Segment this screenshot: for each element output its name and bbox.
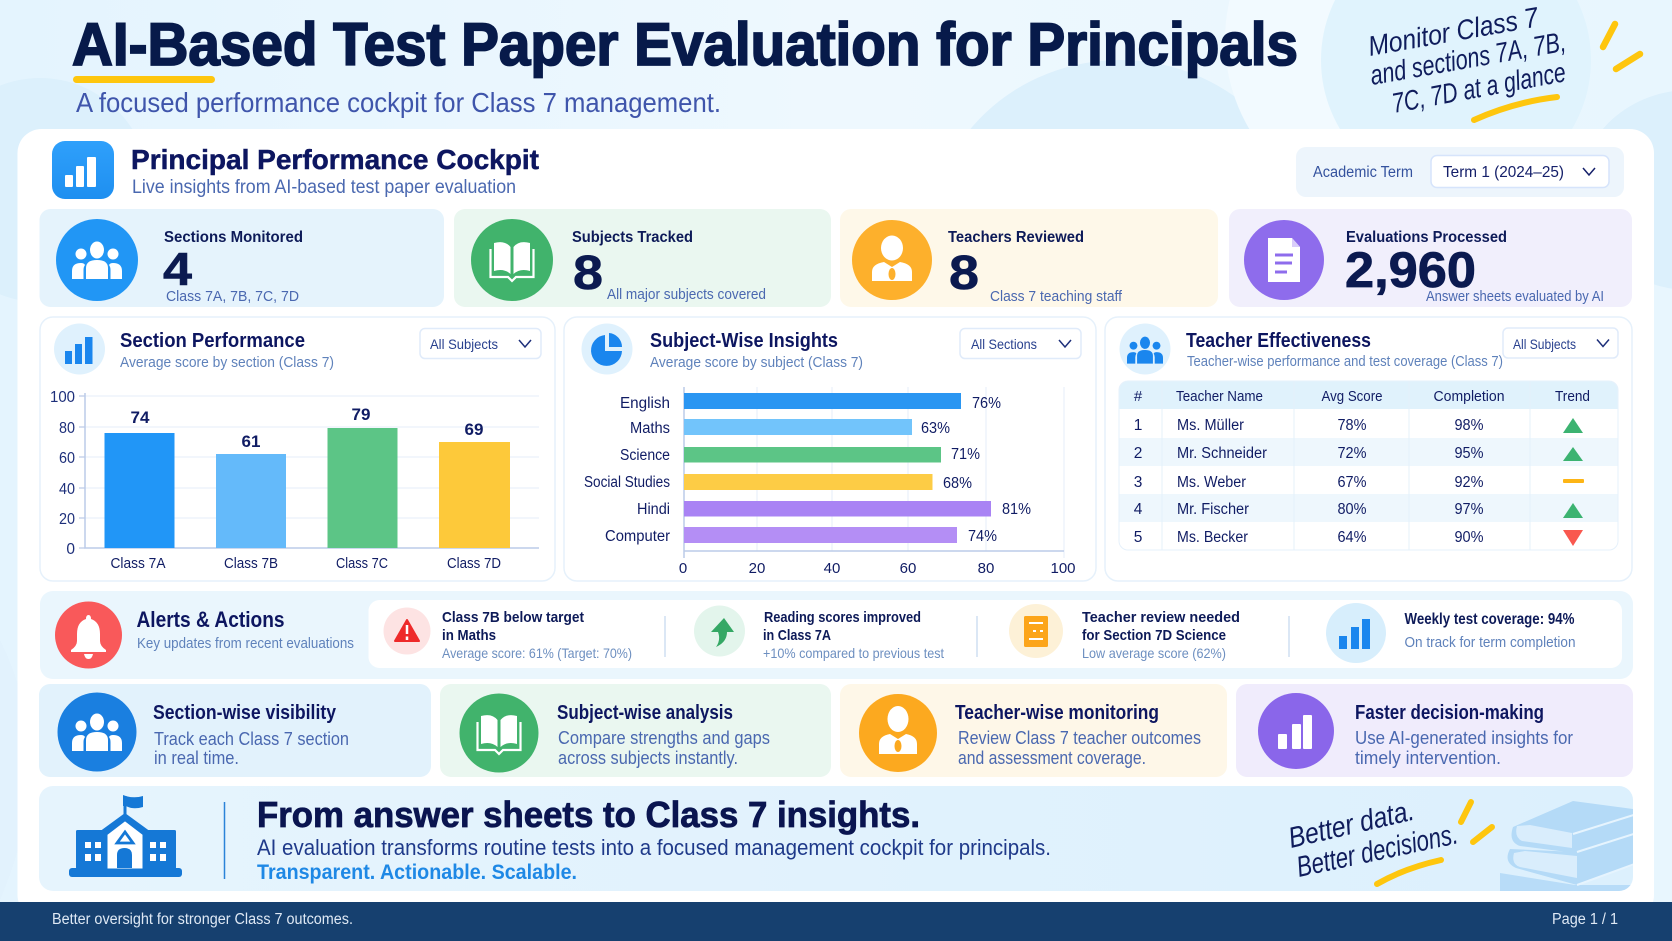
horizontal bar chart: subject scores: Maths	[630, 420, 670, 437]
table row 1: 78%	[1338, 417, 1367, 434]
alert: below target: Average score: 61% (Target: 70%)	[442, 645, 632, 661]
table row 3: 3	[1134, 474, 1142, 491]
academic term selector: Academic Term	[1313, 164, 1413, 181]
alerts heading: Alerts & Actions	[136, 607, 284, 632]
bar chart: section scores: 20	[59, 511, 75, 528]
icon: teacher	[852, 220, 932, 300]
table row 5: 90%	[1454, 529, 1484, 546]
icon: teacher	[859, 694, 937, 772]
bar chart: section scores: 69	[465, 420, 483, 439]
table row 1: 1	[1134, 417, 1142, 434]
dropdown: All Sections	[971, 336, 1037, 352]
horizontal bar chart: subject scores	[584, 387, 1076, 577]
KPI: teachers reviewed: Teachers Reviewed	[948, 229, 1084, 246]
alert: reading improved: +10% compared to previous test	[763, 645, 944, 661]
panel: section performance: Average score by section (Class 7)	[120, 354, 334, 371]
table row 5	[1134, 529, 1583, 546]
table: teachers: Completion	[1434, 388, 1504, 405]
horizontal bar chart: subject scores: Hindi	[637, 501, 670, 518]
panel: section performance	[40, 317, 555, 581]
title: AI-Based Test Paper Evaluation for Principals	[72, 11, 1298, 78]
banner text: AI evaluation transforms routine tests into a focused management cockpit for principals.	[257, 835, 1051, 860]
icon: bell	[55, 602, 122, 668]
academic term selector: Term 1 (2024–25)	[1443, 164, 1564, 181]
feature: subject-wise analysis: Subject-wise analysis	[557, 702, 733, 724]
feature: teacher-wise monitoring: and assessment coverage.	[958, 748, 1146, 768]
dropdown	[420, 328, 541, 358]
horizontal bar chart: subject scores: 63%	[921, 420, 950, 437]
heading: Subject-Wise Insights	[650, 330, 838, 352]
KPI: subjects tracked	[454, 209, 831, 307]
feature: section-wise visibility: Track each Class 7 section	[154, 729, 349, 749]
dropdown: All Subjects	[430, 336, 498, 352]
KPI: sections monitored: 4	[163, 243, 192, 295]
table: teachers	[1119, 381, 1618, 550]
KPI: subjects tracked: 8	[573, 247, 603, 300]
table: teachers: Avg Score	[1322, 388, 1382, 405]
callout: monitor class 7	[1366, 1, 1640, 120]
icon: book	[460, 694, 538, 772]
callout: better data: Better decisions.	[1294, 818, 1461, 884]
feature: faster decision-making: timely intervention.	[1355, 748, 1501, 768]
table row 1: 98%	[1454, 417, 1484, 434]
horizontal bar chart: subject scores: 20	[749, 560, 765, 577]
heading: Teacher Effectiveness	[1186, 330, 1371, 352]
bar chart: section scores: 0	[66, 541, 75, 558]
bar chart: section scores: Class 7B	[224, 555, 278, 572]
feature: faster decision-making: Faster decision-making	[1355, 702, 1544, 724]
horizontal bar chart: subject scores: Social Studies	[584, 474, 670, 491]
horizontal bar chart: subject scores: 68%	[943, 475, 972, 492]
table row 4: 97%	[1454, 501, 1484, 518]
alert: weekly coverage	[1326, 603, 1576, 663]
bar chart: section scores: 80	[59, 420, 75, 437]
table row 5: Ms. Becker	[1177, 529, 1248, 546]
table row 3: 67%	[1338, 474, 1367, 491]
horizontal bar chart: subject scores: 71%	[951, 446, 980, 463]
icon: teachers	[1120, 324, 1170, 374]
KPI: subjects tracked: Subjects Tracked	[572, 229, 693, 246]
alert: teacher review: Teacher review needed	[1082, 609, 1240, 626]
table row 4: 4	[1134, 501, 1143, 518]
heading: Section Performance	[120, 330, 305, 352]
feature: faster decision-making	[1236, 684, 1633, 777]
footer	[0, 902, 1672, 941]
bar chart: section scores: 60	[59, 450, 75, 467]
icon: people	[58, 692, 136, 772]
KPI: evaluations processed: Evaluations Processed	[1346, 229, 1507, 246]
dropdown	[1503, 328, 1618, 358]
alert: reading improved	[694, 606, 944, 661]
background	[0, 0, 1672, 300]
table row 5: 64%	[1338, 529, 1367, 546]
table row 5: 5	[1134, 529, 1142, 546]
bar chart: section scores: Class 7C	[336, 555, 388, 572]
feature: section-wise visibility	[39, 684, 431, 777]
bar chart: section scores: 61	[242, 432, 260, 451]
table row 4	[1134, 501, 1583, 518]
KPI: evaluations processed	[1229, 209, 1632, 307]
icon: bars	[54, 324, 105, 374]
callout: better data: Better data.	[1285, 795, 1417, 855]
horizontal bar chart: subject scores: English	[620, 395, 670, 412]
bar chart: section scores: Class 7D	[447, 555, 501, 572]
panel: subject-wise insights: Average score by subject (Class 7)	[650, 354, 863, 371]
alert: weekly coverage: On track for term completion	[1404, 635, 1576, 651]
table row 2	[1134, 445, 1583, 462]
table: teachers: Teacher Name	[1176, 388, 1263, 405]
illustration: books	[1500, 801, 1640, 891]
feature: teacher-wise monitoring	[840, 684, 1227, 777]
table: teachers: #	[1134, 388, 1143, 405]
KPI: sections monitored	[40, 209, 444, 307]
table: teachers: Trend	[1555, 388, 1590, 405]
panel: teacher effectiveness: Teacher-wise performance and test coverage (Class 7)	[1187, 353, 1503, 370]
feature: subject-wise analysis	[440, 684, 831, 777]
bar chart: section scores: 100	[50, 389, 75, 406]
horizontal bar chart: subject scores: 40	[824, 560, 840, 577]
feature: teacher-wise monitoring: Review Class 7 teacher outcomes	[958, 728, 1201, 748]
horizontal bar chart: subject scores: Science	[620, 447, 670, 464]
KPI: teachers reviewed: 8	[949, 247, 979, 300]
panel: subject-wise insights	[564, 317, 1096, 581]
table row 1: Ms. Müller	[1177, 417, 1244, 434]
icon: pie	[582, 324, 632, 374]
alert: below target: in Maths	[442, 627, 496, 644]
alert: teacher review	[1009, 604, 1240, 661]
panel: alerts and actions: Key updates from recent evaluations	[137, 635, 354, 652]
bar chart: section scores: Class 7A	[110, 555, 166, 572]
KPI: sections monitored: Class 7A, 7B, 7C, 7D	[166, 288, 299, 305]
KPI: subjects tracked: All major subjects covered	[607, 286, 766, 303]
horizontal bar chart: subject scores: 80	[978, 560, 994, 577]
alert: below target: Class 7B below target	[442, 609, 584, 626]
horizontal bar chart: subject scores: 74%	[968, 528, 997, 545]
subtitle: A focused performance cockpit for Class 7 management.	[76, 87, 721, 118]
icon: cockpit bars	[52, 141, 114, 199]
bar chart: section scores: 74	[131, 408, 150, 427]
dropdown: All Subjects	[1513, 336, 1576, 352]
alerts strip	[368, 600, 1622, 668]
table row 1	[1134, 417, 1583, 434]
alert: reading improved: in Class 7A	[763, 627, 831, 644]
feature: section-wise visibility: Section-wise visibility	[153, 702, 337, 724]
academic term selector	[1296, 147, 1624, 197]
alert: below target	[384, 608, 632, 661]
banner tagline: Transparent. Actionable. Scalable.	[257, 861, 577, 884]
table row 4: Mr. Fischer	[1177, 501, 1249, 518]
horizontal bar chart: subject scores: 76%	[972, 395, 1001, 412]
alert: weekly coverage: Weekly test coverage: 94%	[1404, 611, 1574, 628]
KPI: evaluations processed: Answer sheets evaluated by AI	[1426, 288, 1604, 305]
cockpit header	[52, 141, 539, 199]
cockpit subheading: Live insights from AI-based test paper evaluation	[132, 176, 516, 198]
feature: section-wise visibility: in real time.	[154, 748, 239, 768]
cockpit heading: Principal Performance Cockpit	[131, 144, 539, 175]
KPI: teachers reviewed	[840, 209, 1218, 307]
feature: subject-wise analysis: Compare strengths and gaps	[558, 728, 770, 748]
feature: teacher-wise monitoring: Teacher-wise monitoring	[955, 702, 1159, 724]
dropdown	[960, 328, 1081, 358]
callout: monitor class 7: and sections 7A, 7B,	[1368, 26, 1568, 91]
banner heading: From answer sheets to Class 7 insights.	[257, 794, 920, 835]
table row 3	[1134, 474, 1584, 491]
bar chart: section scores: 40	[59, 481, 75, 498]
panel: alerts and actions	[40, 591, 1633, 679]
icon: document	[1244, 220, 1324, 300]
KPI: evaluations processed: 2,960	[1345, 242, 1476, 298]
table row 4: 80%	[1338, 501, 1367, 518]
banner	[39, 786, 1640, 891]
table row 3: 92%	[1454, 474, 1484, 491]
icon: school	[69, 795, 182, 877]
callout: monitor class 7: 7C, 7D at a glance	[1389, 56, 1568, 119]
alert: reading improved: Reading scores improved	[764, 609, 921, 626]
icon: people	[56, 219, 138, 301]
KPI: teachers reviewed: Class 7 teaching staff	[990, 288, 1123, 305]
bar chart: section scores	[50, 389, 539, 572]
horizontal bar chart: subject scores: 100	[1050, 560, 1076, 577]
footer: Better oversight for stronger Class 7 outcomes.	[52, 911, 353, 928]
KPI: sections monitored: Sections Monitored	[164, 229, 303, 246]
alert: teacher review: Low average score (62%)	[1082, 645, 1226, 661]
feature: subject-wise analysis: across subjects instantly.	[558, 748, 738, 768]
bar chart: section scores: 79	[352, 405, 370, 424]
horizontal bar chart: subject scores: 81%	[1002, 501, 1031, 518]
footer: Page 1 / 1	[1552, 911, 1618, 928]
table row 2: 95%	[1454, 445, 1484, 462]
icon: book	[471, 219, 553, 301]
horizontal bar chart: subject scores: 0	[679, 560, 687, 577]
table row 2: 72%	[1338, 445, 1367, 462]
feature: faster decision-making: Use AI-generated insights for	[1355, 728, 1573, 748]
icon: bars	[1258, 693, 1334, 769]
horizontal bar chart: subject scores: Computer	[605, 528, 670, 545]
horizontal bar chart: subject scores: 60	[900, 560, 916, 577]
table row 2: Mr. Schneider	[1177, 445, 1267, 462]
table row 2: 2	[1134, 445, 1142, 462]
panel: teacher effectiveness	[1105, 317, 1632, 581]
table row 3: Ms. Weber	[1177, 474, 1246, 491]
alert: teacher review: for Section 7D Science	[1082, 627, 1226, 644]
